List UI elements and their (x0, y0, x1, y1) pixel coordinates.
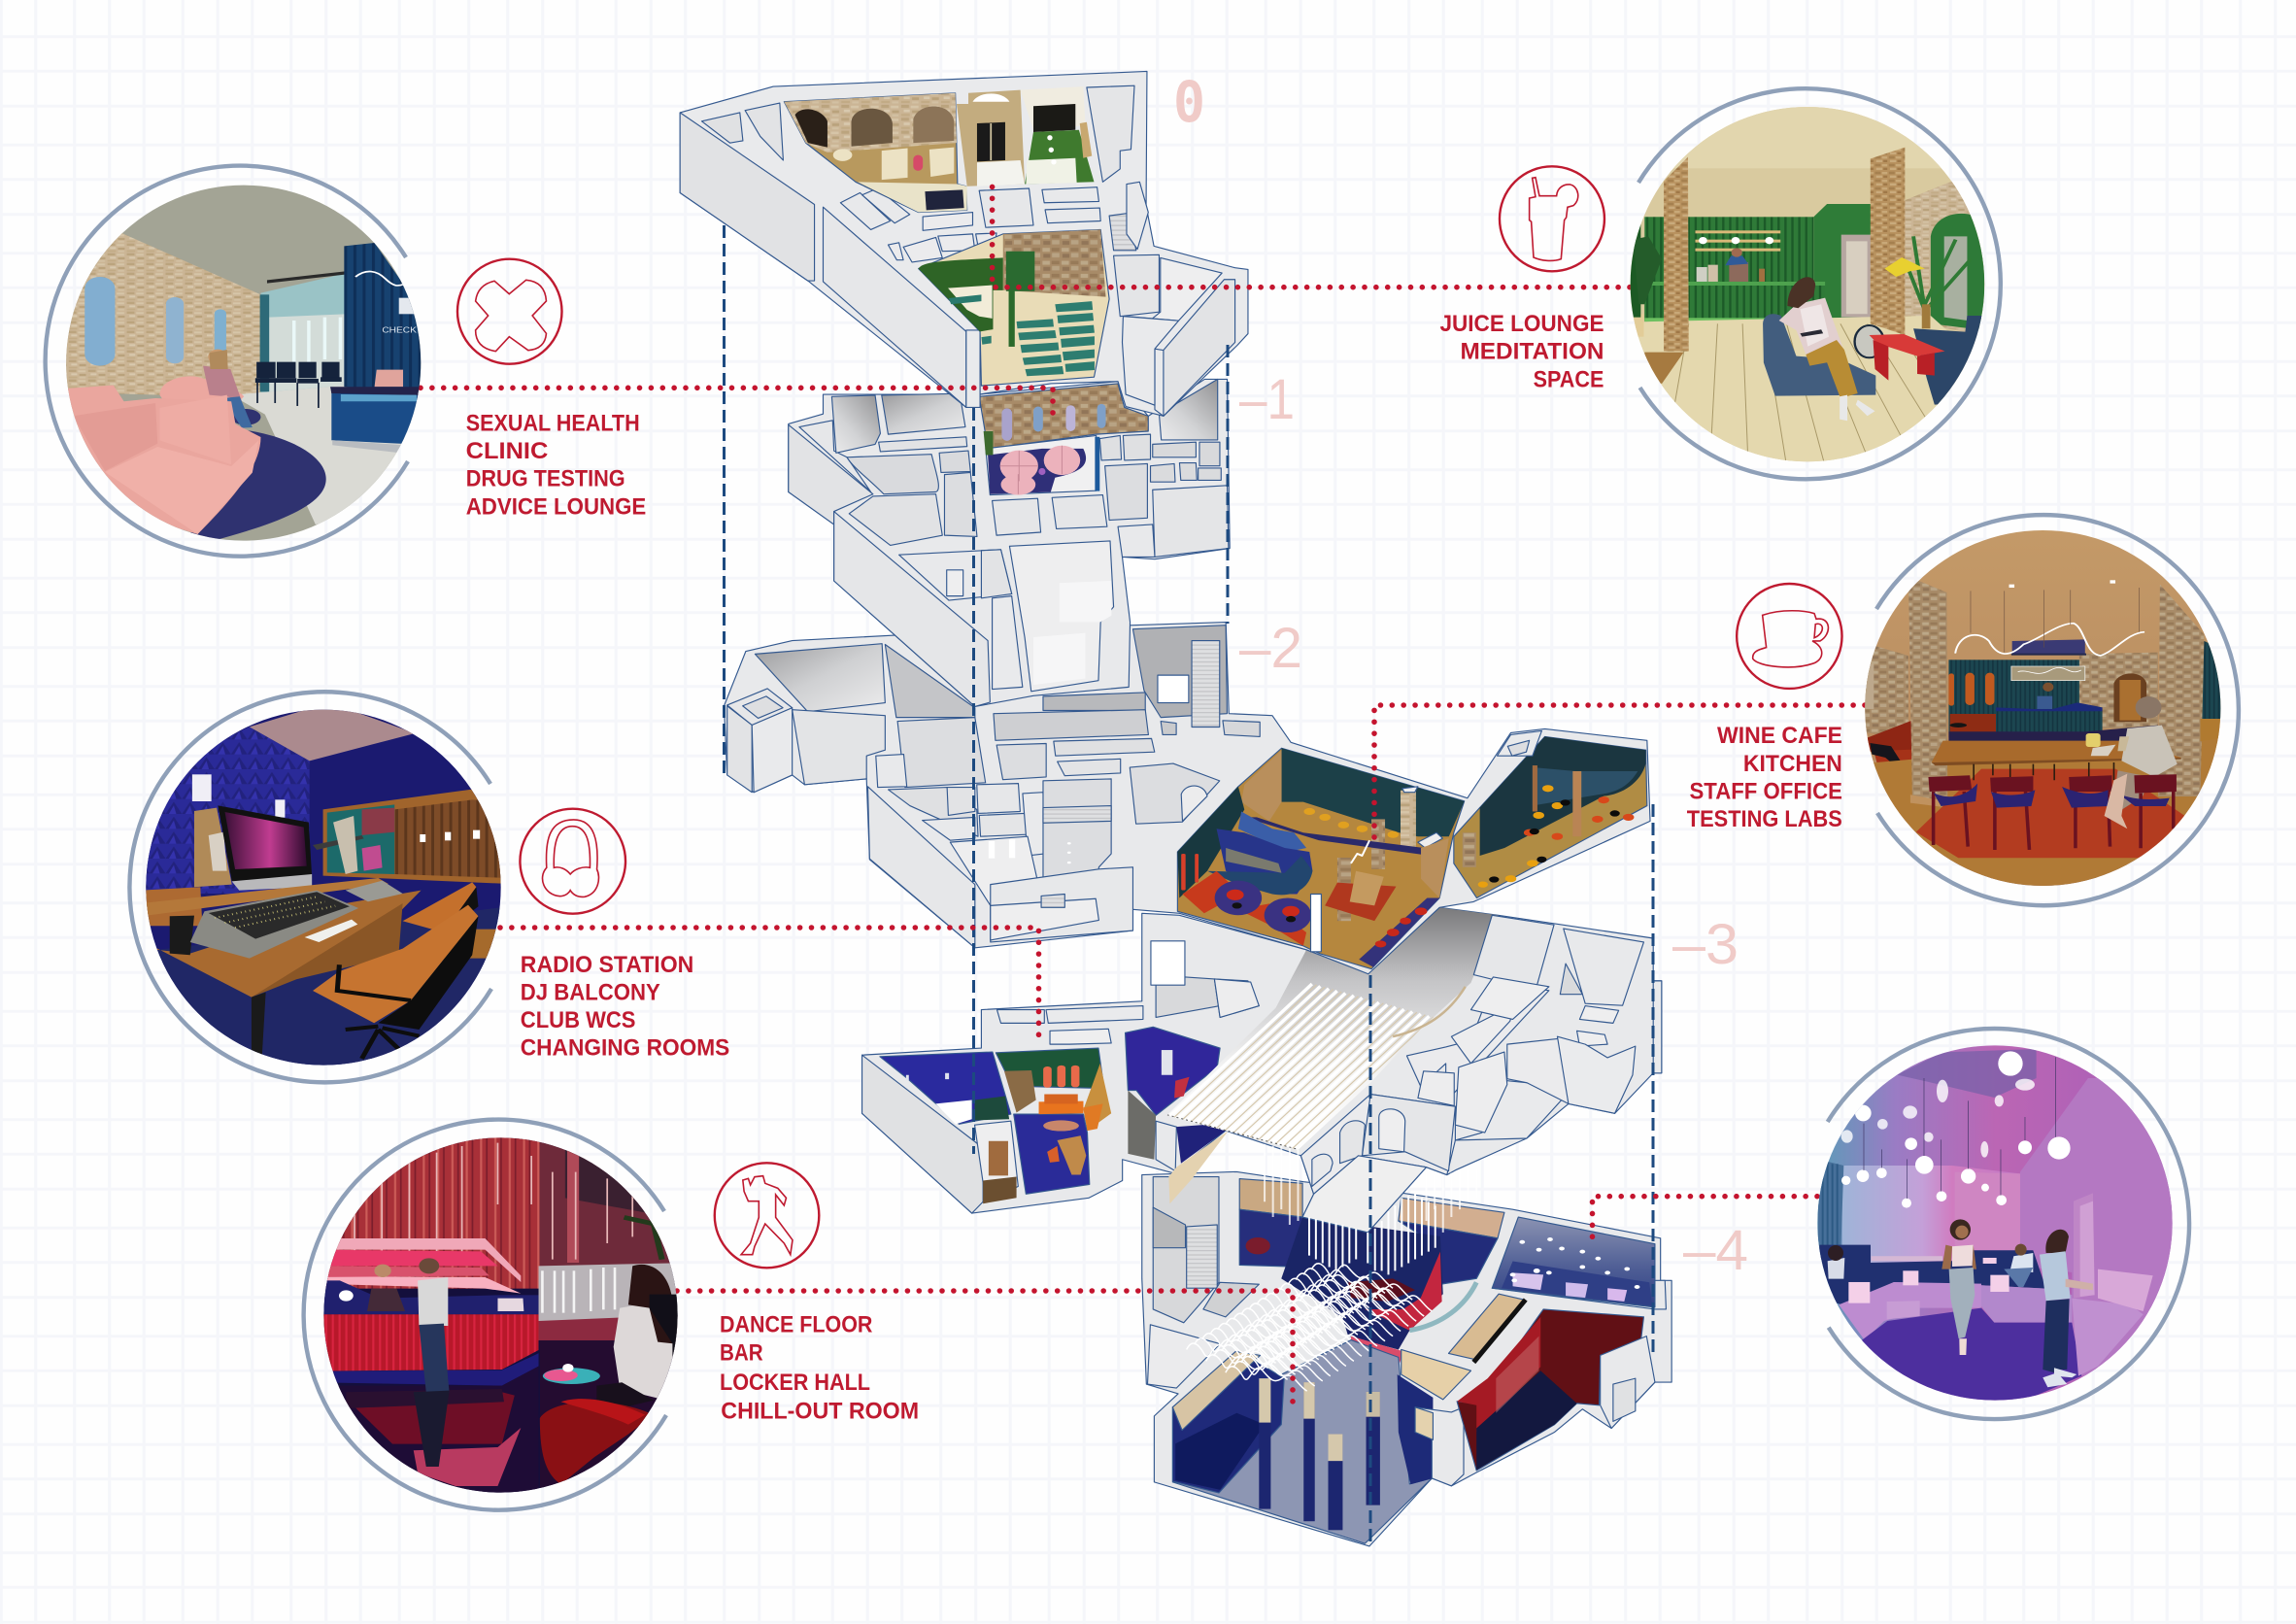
dashed vertical alignment lines (725, 225, 1653, 1544)
label: dance floor: LOCKER HALL (720, 1370, 870, 1396)
label: dance floor: DANCE FLOOR (720, 1312, 872, 1338)
meditation rendered room (919, 229, 1109, 386)
panel: dance floor bar (304, 1120, 919, 1510)
dotted red leader lines (421, 182, 1865, 1408)
hanging strands and wave ceiling over the dance floor (1187, 1144, 1476, 1391)
axonometric level 0: juice lounge and meditation (680, 71, 1248, 416)
label: clinic: DRUG TESTING (466, 466, 625, 492)
icon: cross (457, 259, 562, 364)
render: clinic lounge: CHECK (382, 326, 417, 335)
level numbers (1173, 69, 1748, 1282)
panel: chill-out room (1816, 1029, 2189, 1419)
cafe room (1177, 748, 1465, 969)
render: juice lounge (1626, 104, 1990, 466)
icon: coffee cup (1737, 584, 1842, 689)
render: radio booth (141, 702, 509, 1071)
level numbers: 0 (1173, 69, 1205, 135)
panel: sexual health clinic (46, 166, 646, 557)
label: wine cafe: TESTING LABS (1687, 806, 1842, 832)
ring: chill-out (1828, 1029, 2189, 1419)
label: radio station: CHANGING ROOMS (521, 1035, 729, 1062)
label: juice lounge: JUICE LOUNGE (1439, 311, 1604, 337)
label: wine cafe: KITCHEN (1743, 751, 1842, 777)
label: wine cafe: STAFF OFFICE (1690, 778, 1842, 804)
render: bar (317, 1133, 695, 1499)
panel: juice lounge (1439, 88, 2001, 479)
label: radio station: RADIO STATION (521, 952, 693, 978)
icon: dancer (715, 1163, 819, 1268)
panel: radio station (129, 692, 729, 1082)
label: juice lounge (1439, 311, 1604, 392)
label: radio station: DJ BALCONY (521, 979, 660, 1005)
axonometric level -2: wine cafe and cafe tables (725, 623, 1650, 974)
ring: clinic (46, 166, 408, 557)
label: dance floor: CHILL-OUT ROOM (721, 1399, 919, 1425)
render: chill-out room (1816, 1042, 2176, 1405)
label: clinic: ADVICE LOUNGE (466, 493, 646, 520)
label: dance floor (720, 1312, 919, 1425)
level numbers: –1 (1239, 368, 1295, 431)
icon: headphones (520, 809, 625, 914)
axonometric level -1: sexual health clinic (789, 379, 1230, 706)
label: clinic: CLINIC (466, 438, 548, 464)
label: radio station: CLUB WCS (521, 1007, 635, 1033)
ring: juice (1638, 88, 2001, 479)
ring: radio (129, 692, 491, 1082)
render: wine cafe (1859, 524, 2227, 891)
ring: wine cafe (1876, 515, 2239, 905)
level numbers: –2 (1239, 617, 1302, 680)
label: wine cafe (1687, 723, 1842, 832)
label: wine cafe: WINE CAFE (1717, 723, 1842, 749)
axonometric level -3: radio station and slatted ceiling (862, 907, 1662, 1233)
ring: bar (304, 1120, 666, 1510)
icon: juice glass (1500, 166, 1604, 271)
arch hall rendered room (784, 93, 967, 213)
render: clinic lounge (66, 185, 422, 541)
label: juice lounge: MEDITATION (1461, 338, 1604, 364)
label: radio station (521, 952, 729, 1062)
level numbers: –4 (1683, 1219, 1748, 1282)
axonometric level -4: dance floor (1142, 1171, 1671, 1546)
level numbers: –3 (1672, 913, 1739, 976)
cafe terrace room (1454, 736, 1647, 897)
label: dance floor: BAR (720, 1340, 763, 1367)
panel: wine cafe (1687, 515, 2239, 905)
label: clinic: SEXUAL HEALTH (466, 410, 640, 436)
label: juice lounge: SPACE (1534, 366, 1604, 392)
label: clinic (466, 410, 646, 520)
